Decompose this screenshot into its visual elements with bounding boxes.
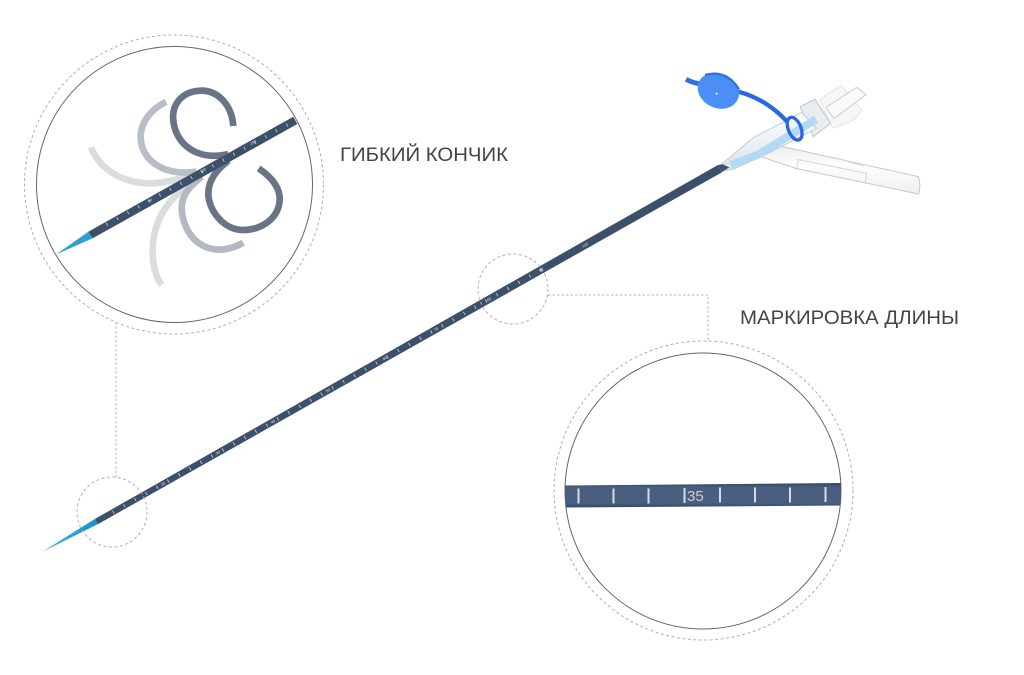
catheter shaft <box>95 165 722 524</box>
side arm sheath <box>761 146 920 194</box>
hub inner blue channel <box>731 119 816 165</box>
zoomed tube numbers <box>147 139 257 204</box>
flexing tip curves <box>91 91 280 285</box>
magnified tick marks <box>578 487 826 504</box>
hub assembly <box>686 66 920 194</box>
dark shaft joint <box>718 164 729 172</box>
inner circle <box>36 46 312 322</box>
shaft numbers: 60 <box>382 356 388 361</box>
zoomed tube numbers: 100 <box>199 167 207 174</box>
hub body <box>720 113 817 171</box>
shaft numbers: 90 <box>538 267 544 273</box>
zoomed tube <box>88 117 297 238</box>
small dashed circle: tip <box>77 477 147 547</box>
connector wings <box>820 85 862 128</box>
shaft numbers: 110 <box>582 242 589 248</box>
zoomed tube numbers: 150 <box>249 139 257 146</box>
connector cylinder <box>826 87 866 119</box>
shaft numbers: 80 <box>486 297 492 302</box>
label: length marking: МАРКИРОВКА ДЛИНЫ <box>740 308 959 329</box>
connector collar <box>800 99 831 137</box>
panel: length marking zoom <box>554 341 853 640</box>
zoomed tube ticks <box>106 120 296 224</box>
label: flexible tip: ГИБКИЙ КОНЧИК <box>340 144 508 166</box>
catheter blue tip <box>42 519 98 552</box>
shaft numbers: 40 <box>270 419 276 425</box>
shaft numbers: 70 <box>433 327 439 332</box>
blue ring <box>784 115 805 142</box>
zoomed tube numbers: 50 <box>147 198 153 204</box>
marking number: 35 <box>687 488 704 505</box>
panel: tip zoom <box>24 35 324 334</box>
magnified shaft <box>560 483 846 508</box>
blue line with balloon <box>686 66 787 122</box>
inner circle <box>565 353 841 629</box>
outer dashed circle <box>24 35 324 334</box>
shaft tick marks <box>113 267 546 512</box>
shaft numbers: 30 <box>215 450 221 456</box>
shaft numbers: 50 <box>325 388 331 394</box>
outer dashed circle <box>554 341 853 640</box>
connector: tip circle to tip zoom <box>115 322 117 477</box>
zoomed tube tip <box>56 232 93 254</box>
small dashed circle: marking <box>478 254 548 324</box>
main catheter <box>42 165 722 552</box>
shaft numbers: 20 <box>160 481 166 487</box>
connector: marking circle to marking zoom <box>548 295 708 341</box>
shaft numbers <box>160 242 589 487</box>
